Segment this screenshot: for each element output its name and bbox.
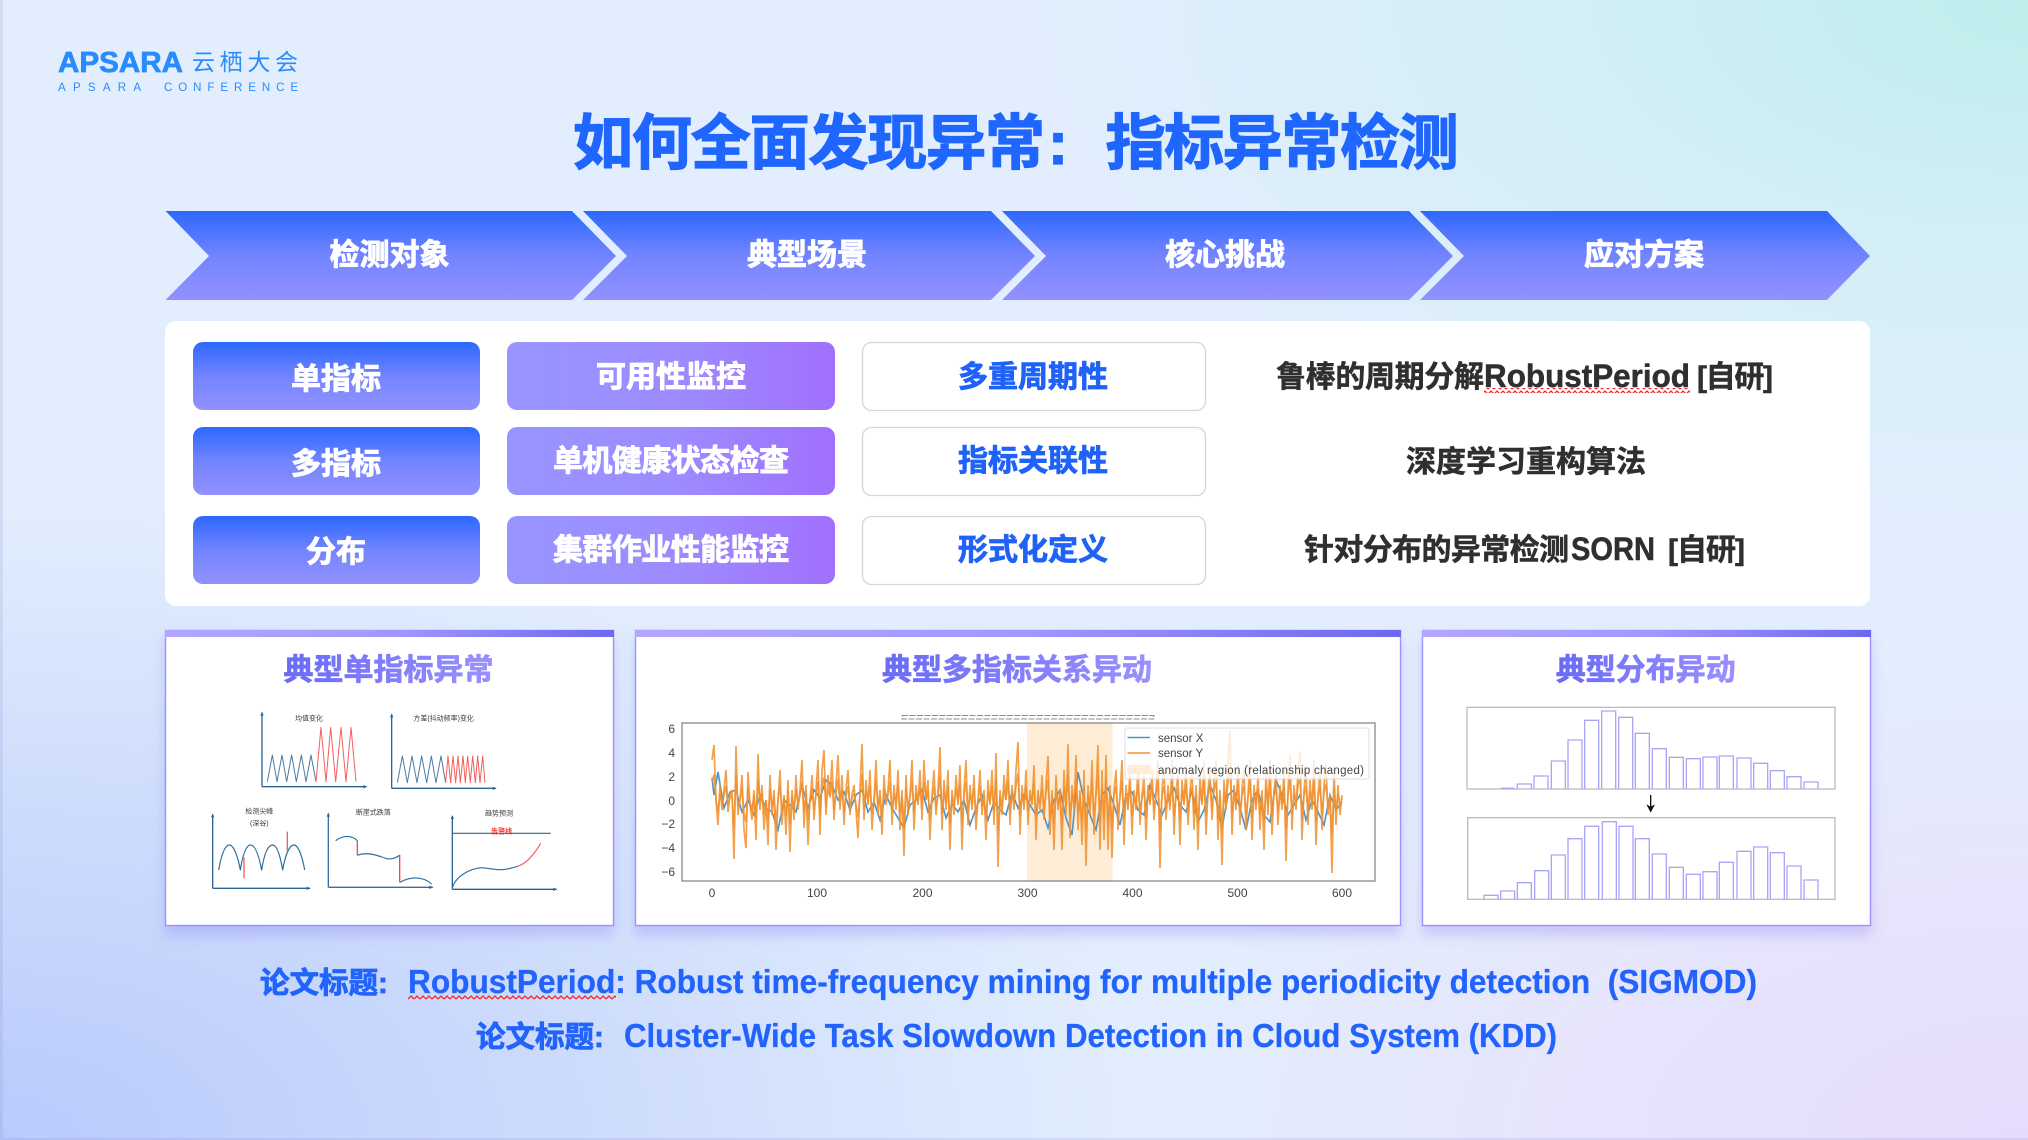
- heading: 典型单指标异常: [284, 654, 494, 687]
- title: 指标异常检测: [1106, 110, 1459, 177]
- paper citation 1: 论文标题:: [260, 967, 388, 1000]
- chart: spikes: 检测尖峰: [245, 806, 273, 815]
- x axis labels: 100: [807, 886, 827, 900]
- y axis labels: 2: [668, 770, 675, 784]
- chart: variance change: 方差(抖动频率)变化: [413, 713, 474, 722]
- panel: multi metric anomaly: [635, 630, 1401, 926]
- solutions text: [自研]: [1668, 534, 1745, 567]
- logo: Apsara Conference: APSARA: [58, 82, 141, 94]
- challenge boxes: 形式化定义: [958, 534, 1108, 567]
- solutions text: RobustPeriod: [1484, 358, 1690, 394]
- x axis labels: [709, 886, 1352, 900]
- y axis labels: 0: [668, 794, 675, 808]
- chevron: 典型场景: 典型场景: [747, 239, 867, 272]
- y axis labels: −4: [661, 841, 675, 855]
- detection target buttons: 分布: [306, 536, 366, 569]
- chart: variance change: [390, 713, 497, 790]
- plot frame: [682, 723, 1375, 881]
- logo: Apsara Conference: [58, 47, 298, 94]
- detection target buttons: 单指标: [291, 363, 381, 396]
- y axis labels: [661, 722, 675, 879]
- chevron: 检测对象: 检测对象: [330, 239, 450, 272]
- challenge boxes: 多重周期性: [958, 361, 1108, 394]
- logo: Apsara Conference: APSARA: [58, 47, 183, 79]
- heading: 典型分布异动: [1556, 654, 1736, 687]
- x axis labels: 500: [1227, 886, 1248, 900]
- chevron: 应对方案: 应对方案: [1584, 239, 1704, 272]
- panel: single metric anomalies: [165, 630, 614, 926]
- arrow: distribution shift: [1646, 795, 1655, 813]
- paper citation 1: RobustPeriod: Robust time-frequency mining for multiple periodicity detection (SIGMOD): [408, 963, 1757, 1000]
- solutions text: [1276, 358, 1773, 567]
- process chevrons: [166, 211, 1870, 300]
- y axis labels: −2: [661, 817, 675, 831]
- legend: sensor X: [1158, 733, 1204, 745]
- logo: Apsara Conference: 云栖大会: [192, 49, 298, 75]
- detection target buttons: 多指标: [291, 448, 381, 481]
- sensor Y line: [712, 730, 1342, 873]
- x axis labels: 400: [1122, 886, 1143, 900]
- panel: distribution anomaly: [1422, 630, 1871, 926]
- chevron: 核心挑战: 核心挑战: [1165, 239, 1285, 272]
- detection target buttons: [193, 342, 480, 584]
- chart: mean change: 均值变化: [295, 713, 323, 722]
- chart: trend forecast: 告警线: [491, 826, 512, 835]
- x axis labels: 300: [1017, 886, 1038, 900]
- challenge boxes: 指标关联性: [958, 445, 1108, 478]
- chevron: 检测对象: [166, 211, 616, 300]
- x axis labels: 200: [912, 886, 933, 900]
- legend: anomaly region (relationship changed): [1158, 765, 1364, 777]
- scenario buttons: 单机健康状态检查: [553, 445, 789, 478]
- histogram: after: [1468, 818, 1835, 899]
- chart: spikes: [211, 806, 311, 890]
- sensor X line: [712, 772, 1342, 835]
- scenario buttons: [507, 342, 835, 584]
- y axis labels: −6: [661, 865, 675, 879]
- small line charts: [211, 712, 557, 891]
- chart: trend forecast: [451, 809, 557, 891]
- paper citation 2: 论文标题:: [476, 1021, 604, 1054]
- scenario buttons: 可用性监控: [596, 361, 746, 394]
- solutions text: 深度学习重构算法: [1406, 446, 1646, 479]
- chevron: 应对方案: [1420, 211, 1870, 300]
- missing-glyph chart title: [902, 716, 1154, 719]
- legend: sensor Y: [1158, 748, 1204, 760]
- solutions text: SORN: [1571, 531, 1655, 567]
- title: [573, 110, 1459, 177]
- x axis labels: 600: [1332, 886, 1352, 900]
- chart: spikes: (深谷): [250, 819, 269, 828]
- panel: summary table: [165, 321, 1870, 606]
- line chart: sensor X and sensor Y: [661, 722, 1375, 900]
- solutions text: 针对分布的异常检测: [1304, 534, 1569, 567]
- chart: cliff drop: 断崖式跌落: [356, 808, 391, 817]
- title: 如何全面发现异常: [573, 110, 1045, 177]
- chart: trend forecast: 趋势预测: [485, 809, 513, 818]
- chart: cliff drop: [327, 808, 433, 889]
- solutions text: [自研]: [1697, 361, 1773, 394]
- y axis labels: 6: [668, 722, 675, 736]
- paper citation 2: Cluster-Wide Task Slowdown Detection in Cloud System (KDD): [624, 1017, 1557, 1054]
- logo: Apsara Conference: CONFERENCE: [164, 82, 298, 94]
- heading: 典型多指标关系异动: [882, 654, 1152, 687]
- y axis labels: 4: [668, 746, 675, 760]
- histogram: before: [1467, 707, 1835, 789]
- chart: mean change: [260, 712, 367, 788]
- scenario buttons: 集群作业性能监控: [553, 534, 789, 567]
- chevron: 典型场景: [583, 211, 1035, 300]
- solutions text: 鲁棒的周期分解: [1276, 361, 1484, 394]
- challenge boxes: [862, 342, 1206, 584]
- dense core of sensor Y signal: [712, 768, 1342, 834]
- title: :: [1048, 110, 1068, 177]
- x axis labels: 0: [709, 886, 716, 900]
- legend: [1125, 728, 1369, 779]
- chevron: 核心挑战: [1002, 211, 1453, 300]
